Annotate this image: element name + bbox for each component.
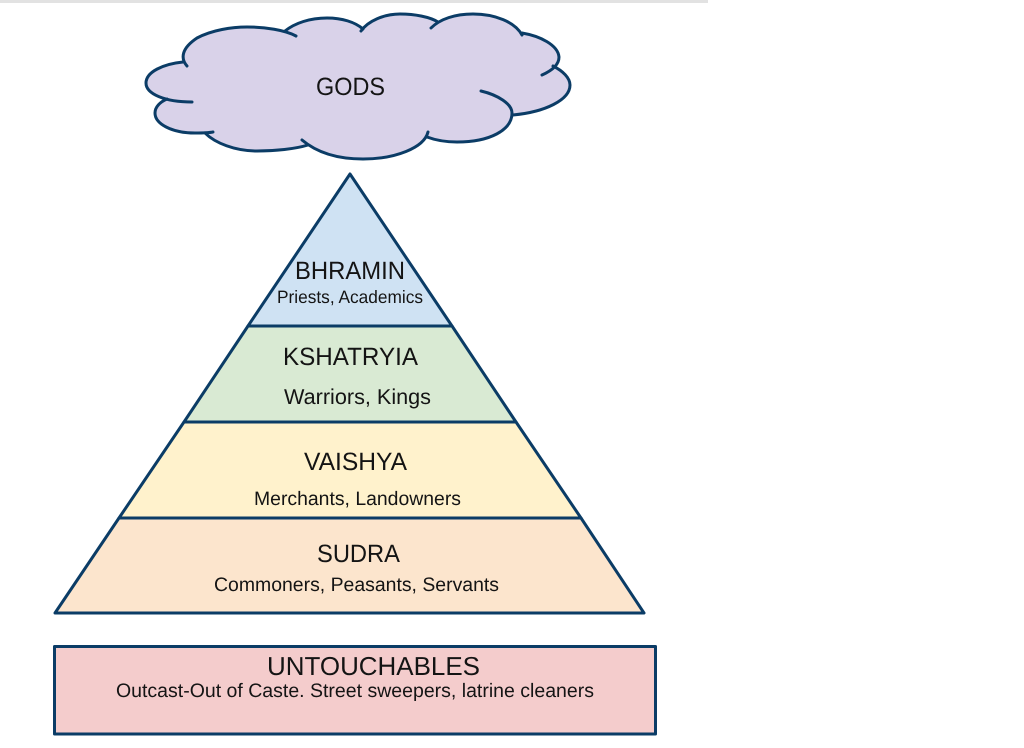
tier: bhramin [248,174,452,326]
tier: sudra: Commoners, Peasants, Servants [214,574,499,596]
panel: untouchables: Outcast-Out of Caste. Street sweepers, latrine cleaners [116,680,594,702]
tier: kshatryia: Warriors, Kings [284,385,431,409]
tier: sudra [55,518,644,613]
tier: kshatryia: KSHATRYIA [283,343,418,371]
panel: untouchables [54,646,656,734]
panel: untouchables: UNTOUCHABLES [267,651,480,681]
tier: bhramin: BHRAMIN [295,257,405,285]
tier: vaishya: VAISHYA [304,448,407,476]
tier: sudra: SUDRA [317,540,400,568]
label: gods: GODS [316,73,385,101]
tier: vaishya: Merchants, Landowners [254,488,461,510]
pyramid [55,174,644,613]
cloud: gods [146,14,570,159]
tier: bhramin: Priests, Academics [277,287,423,307]
tier: vaishya [119,422,581,518]
tier: kshatryia [184,326,516,422]
